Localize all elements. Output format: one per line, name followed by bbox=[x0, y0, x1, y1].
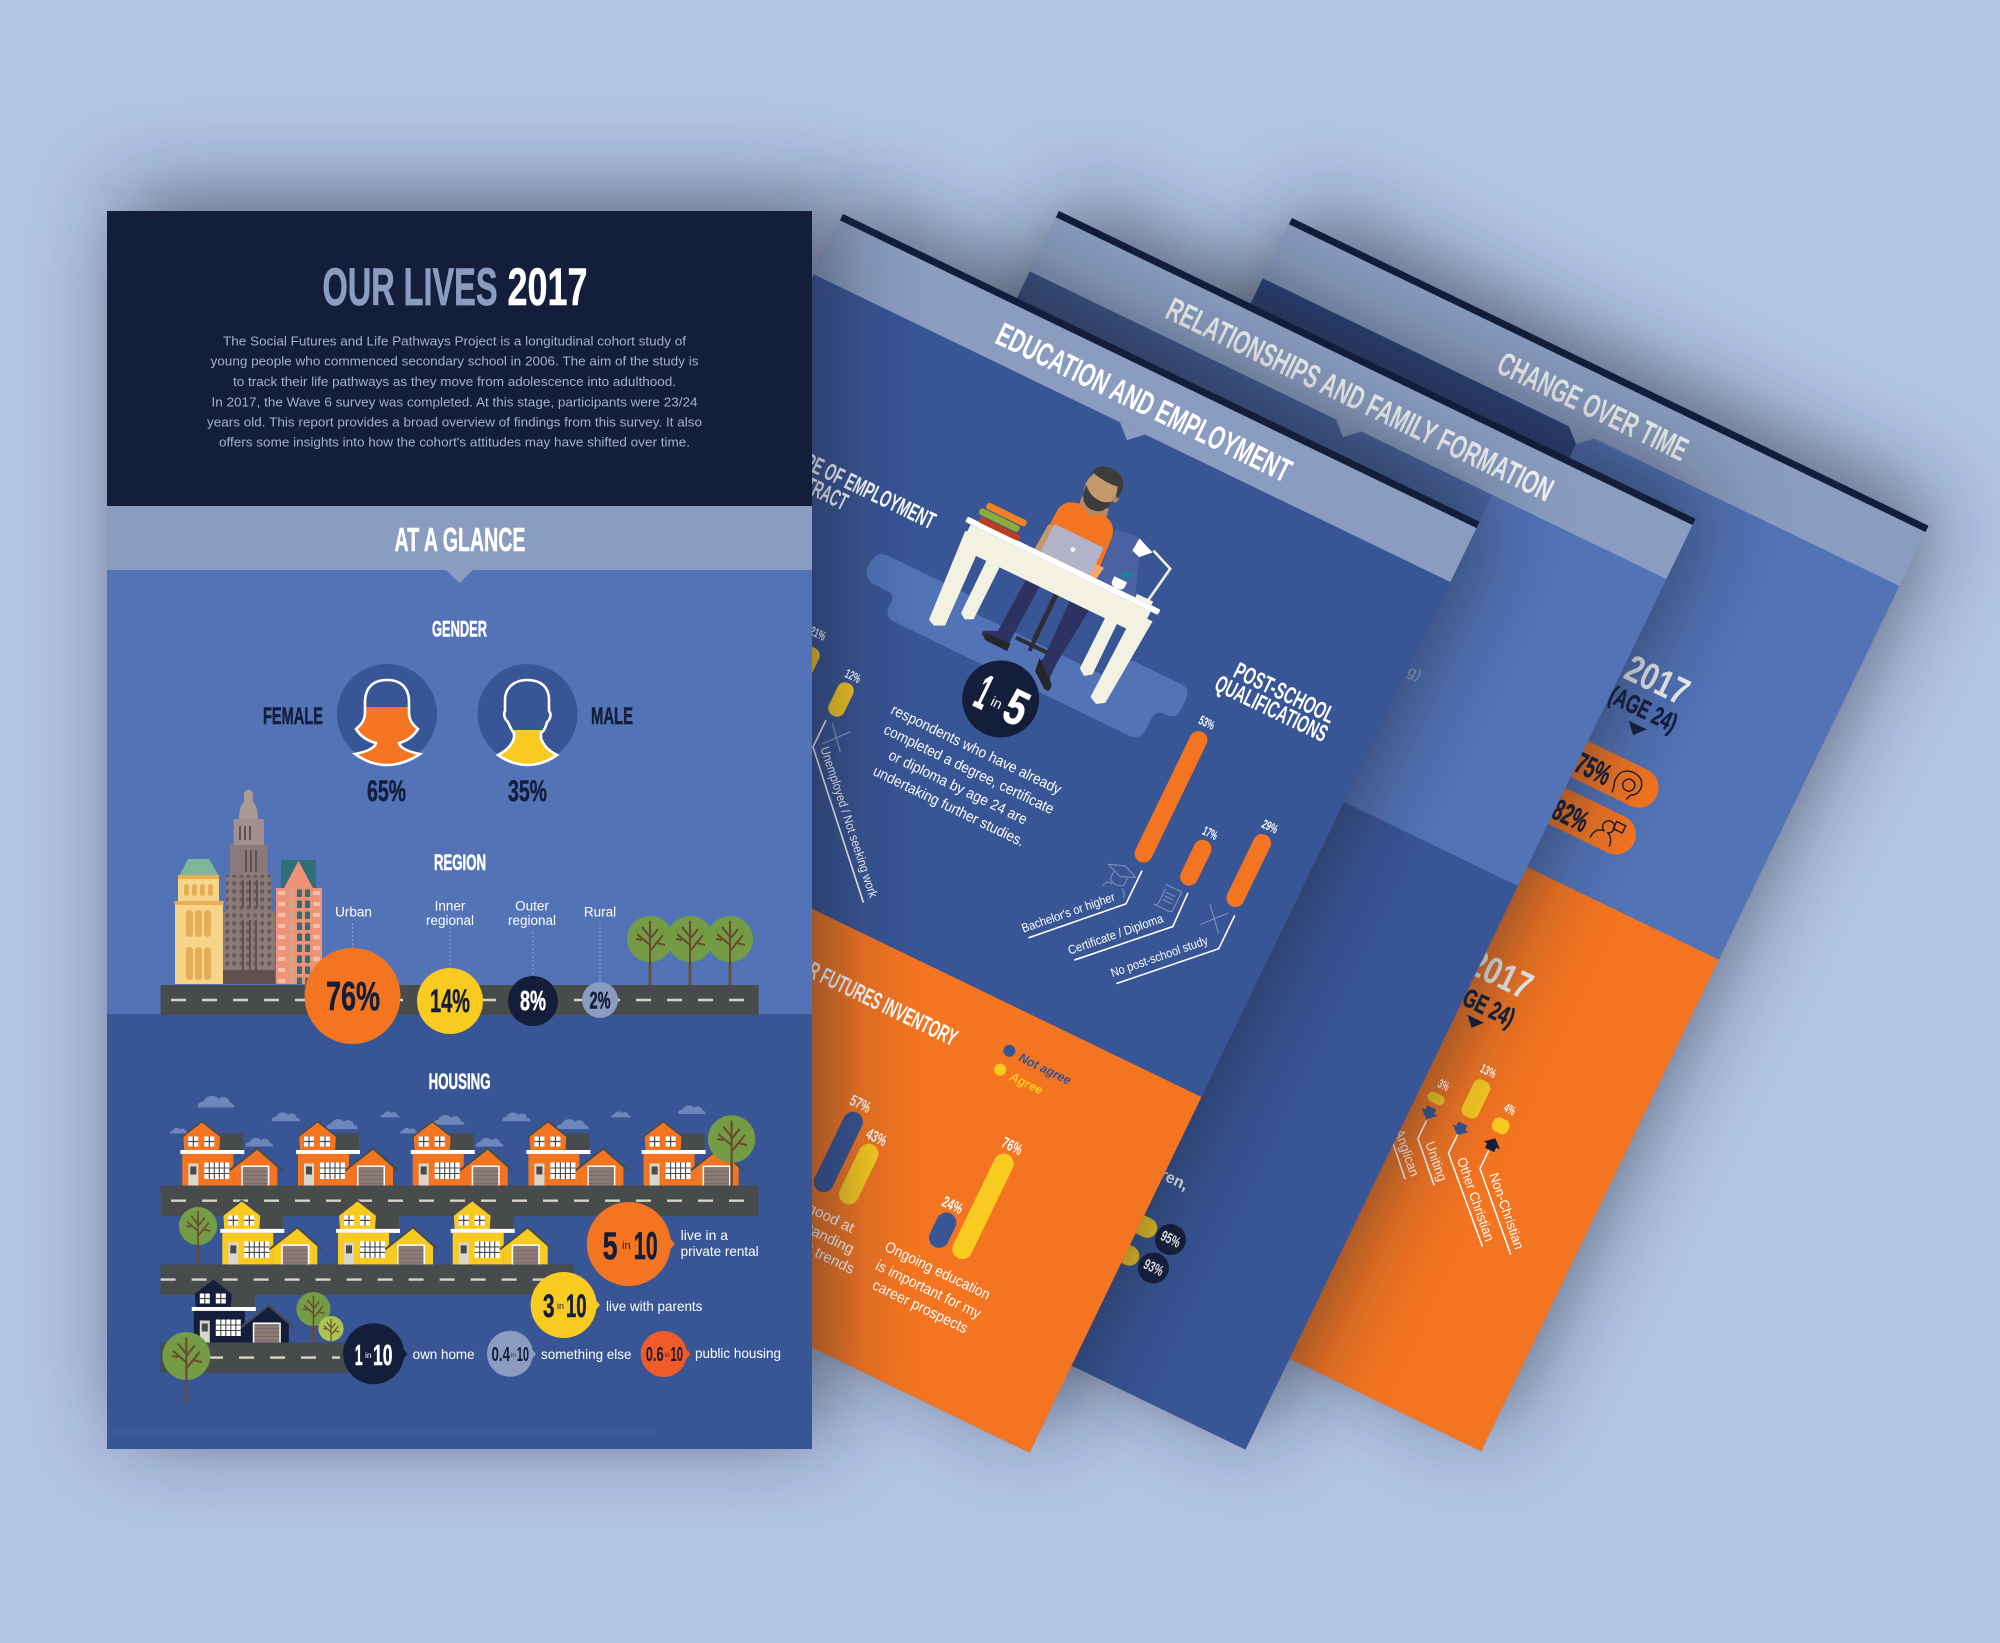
bars: religion change: Anglican bbox=[1392, 1127, 1422, 1178]
intro paragraph: The Social Futures and Life Pathways Project is a longitudinal cohort study of bbox=[223, 334, 686, 348]
bubble: inner regional 14% bbox=[417, 898, 483, 1034]
icon: male 35% bbox=[478, 664, 633, 808]
icon: male 35%: 35% bbox=[508, 775, 547, 808]
title: OUR LIVES bbox=[322, 258, 498, 317]
text fragment: children: ren, bbox=[1157, 1166, 1191, 1194]
badge: 0.4 in 10 something else: 10 bbox=[517, 1344, 529, 1366]
badge: 5 in 10 private rental: live in a bbox=[681, 1227, 728, 1243]
illustration: housing trees bbox=[162, 1115, 755, 1403]
bars: religion change: 3% bbox=[1436, 1076, 1452, 1094]
bar chart: futures inventory: 43% bbox=[863, 1126, 889, 1150]
bar chart: post-school qualifications: 29% bbox=[1260, 816, 1281, 837]
badge: 1 in 10 own home: 10 bbox=[373, 1340, 392, 1372]
road: third row bbox=[161, 1264, 574, 1295]
road: fourth row bbox=[161, 1342, 348, 1373]
bars: 95% and 93%: 95% bbox=[1158, 1228, 1183, 1252]
illustration: yellow houses bbox=[220, 1200, 553, 1264]
badge: 1 in 10 own home: 1 bbox=[355, 1340, 362, 1372]
shadow: education sheet bbox=[409, 199, 1495, 1435]
pill: 75% with head icon: 75% bbox=[1570, 747, 1616, 792]
text: respondents who have already: respondents who have already bbox=[888, 701, 1064, 798]
header block bbox=[107, 211, 812, 506]
illustration: navy house bbox=[192, 1278, 294, 1342]
bubble: rural 2%: Rural bbox=[584, 904, 616, 920]
bar chart: futures inventory: 76% bbox=[999, 1135, 1025, 1159]
band: at a glance bbox=[107, 506, 812, 583]
bar chart: post-school qualifications: 53% bbox=[1196, 712, 1218, 733]
bars: religion change bbox=[1356, 1034, 1591, 1264]
badge: 5 in 10 private rental: private rental bbox=[681, 1243, 759, 1259]
icon: female 65%: FEMALE bbox=[263, 703, 323, 730]
text: ongoing education: career prospects bbox=[869, 1277, 971, 1337]
labels: region dotted leaders bbox=[352, 923, 600, 982]
heading: change over time: CHANGE OVER TIME bbox=[1492, 345, 1694, 468]
intro paragraph: In 2017, the Wave 6 survey was completed. At this stage, participants were 23/24 bbox=[212, 394, 698, 409]
bars: religion change: Uniting bbox=[1422, 1140, 1450, 1183]
bars: 95% and 93% bbox=[1034, 1170, 1191, 1290]
heading: 2017 age 24 lower: (AGE 24) bbox=[1442, 974, 1520, 1033]
badge: 3 in 10 live with parents: 10 bbox=[566, 1288, 586, 1324]
heading: post-school qualifications bbox=[1210, 652, 1341, 748]
heading: type of employment contract bbox=[775, 441, 940, 554]
intro paragraph bbox=[207, 334, 702, 450]
pill: 75% with head icon bbox=[1504, 709, 1665, 814]
panel: education and employment bbox=[393, 214, 1480, 1453]
badge: 3 in 10 live with parents bbox=[531, 1272, 702, 1338]
text: respondents who have already: undertaking further studies. bbox=[870, 763, 1027, 850]
bar chart: post-school qualifications: Certificate / Diploma bbox=[1066, 911, 1165, 958]
illustration: person at desk bbox=[851, 391, 1262, 751]
heading: 2017 age 24 lower bbox=[1437, 938, 1539, 1043]
badge: 5 in 10 private rental: 10 bbox=[634, 1225, 658, 1268]
panel: change over time bbox=[845, 218, 1929, 1451]
heading: type of employment contract: TYPE OF EMPLOYMENT bbox=[784, 441, 940, 535]
text: respondents who have already: completed a degree, certificate bbox=[881, 721, 1057, 818]
badge: 1 in 5: in bbox=[988, 693, 1005, 712]
badge: 0.6 in 10 public housing: 10 bbox=[670, 1344, 683, 1366]
badge: 3 in 10 live with parents: 3 bbox=[543, 1288, 554, 1324]
legend: not agree and agree bbox=[991, 1043, 1073, 1107]
heading: 2017 age 24 upper: (AGE 24) bbox=[1604, 680, 1682, 738]
bubble: inner regional 14%: Inner bbox=[435, 898, 466, 914]
bars: 95% and 93%: 93% bbox=[1141, 1256, 1166, 1280]
heading: 2017 age 24 lower: 2017 bbox=[1461, 942, 1539, 1008]
badge: 0.6 in 10 public housing: 0.6 bbox=[646, 1344, 664, 1366]
pill: 82% with heart icon bbox=[1481, 756, 1643, 861]
bubble: inner regional 14%: regional bbox=[426, 913, 474, 928]
bar chart: futures inventory: 57% bbox=[847, 1092, 873, 1117]
heading: region: REGION bbox=[434, 850, 486, 875]
bubble: inner regional 14%: 14% bbox=[430, 983, 470, 1019]
title: 2017 bbox=[508, 258, 588, 317]
text: good at understanding current trends: current trends bbox=[766, 1222, 857, 1278]
bubble: urban 76% bbox=[304, 904, 400, 1044]
bubble: outer regional 8%: regional bbox=[508, 913, 556, 928]
icon: female 65%: 65% bbox=[367, 775, 406, 808]
heading: relationships and family formation: RELATIONSHIPS AND FAMILY FORMATION bbox=[1161, 290, 1559, 508]
text: ongoing education: Ongoing education bbox=[882, 1238, 993, 1304]
heading: education and employment: EDUCATION AND EMPLOYMENT bbox=[991, 315, 1298, 489]
bar chart: post-school qualifications: 17% bbox=[1200, 823, 1220, 843]
intro paragraph: years old. This report provides a broad overview of findings from this survey. It also bbox=[207, 414, 702, 430]
heading: 2017 age 24 upper: 2017 bbox=[1618, 648, 1696, 714]
bars: religion change: 4% bbox=[1502, 1100, 1518, 1118]
intro paragraph: offers some insights into how the cohort's attitudes may have shifted over time. bbox=[219, 435, 690, 450]
illustration: clouds bbox=[170, 1096, 706, 1146]
bar chart: futures inventory bbox=[809, 1067, 1025, 1263]
pill: 82% with heart icon: 82% bbox=[1547, 794, 1594, 839]
illustration: orange houses bbox=[180, 1122, 744, 1186]
text: good at understanding current trends: I am good at bbox=[774, 1185, 858, 1237]
bars: employment contract fragment: Unemployed / Not seeking work bbox=[818, 745, 880, 900]
heading: post-school qualifications: POST-SCHOOL bbox=[1229, 658, 1339, 729]
badge: 5 in 10 private rental: in bbox=[622, 1240, 631, 1252]
bubble: rural 2% bbox=[582, 904, 618, 1018]
bars: religion change: Non-Christian bbox=[1486, 1171, 1527, 1251]
shadow: change over time sheet bbox=[858, 203, 1942, 1434]
badge: 3 in 10 live with parents: in bbox=[557, 1301, 564, 1311]
bubble: rural 2%: 2% bbox=[590, 988, 610, 1015]
panel: at a glance front sheet bbox=[107, 211, 812, 1449]
bubble: urban 76%: Urban bbox=[335, 904, 372, 920]
badge: 0.6 in 10 public housing bbox=[641, 1331, 781, 1377]
legend: not agree and agree: Not agree bbox=[1017, 1051, 1073, 1088]
badge: 1 in 10 own home: in bbox=[365, 1350, 372, 1360]
bubble: outer regional 8%: 8% bbox=[520, 985, 546, 1016]
heading: 2017 age 24 upper bbox=[1599, 646, 1698, 750]
text fragment: g) bbox=[1405, 663, 1424, 684]
badge: 5 in 10 private rental: 5 bbox=[603, 1225, 618, 1268]
panel: relationships and family formation bbox=[609, 211, 1696, 1450]
illustration: city buildings bbox=[174, 790, 322, 984]
badge: 0.6 in 10 public housing: in bbox=[665, 1353, 670, 1359]
heading: housing: HOUSING bbox=[429, 1069, 491, 1094]
badge: 0.4 in 10 something else: something else bbox=[541, 1346, 632, 1362]
bars: employment contract fragment: 12% bbox=[843, 666, 864, 686]
legend: not agree and agree: Agree bbox=[1007, 1069, 1045, 1097]
badge: 1 in 10 own home: own home bbox=[413, 1346, 475, 1362]
badge: 0.4 in 10 something else bbox=[487, 1331, 632, 1377]
heading: type of employment contract: CONTRACT bbox=[775, 460, 852, 516]
bubble: outer regional 8%: Outer bbox=[515, 898, 549, 914]
road: second row bbox=[161, 1186, 759, 1216]
bar chart: post-school qualifications bbox=[1014, 680, 1310, 1018]
intro paragraph: to track their life pathways as they move from adolescence into adulthood. bbox=[233, 374, 676, 389]
text: good at understanding current trends bbox=[756, 1184, 873, 1278]
text: ongoing education bbox=[865, 1238, 993, 1340]
bubble: outer regional 8% bbox=[508, 898, 558, 1026]
illustration: trees bbox=[627, 916, 753, 985]
icon: female 65% bbox=[263, 664, 437, 808]
text: good at understanding current trends: understanding bbox=[764, 1201, 857, 1258]
heading: post-school qualifications: QUALIFICATIONS bbox=[1210, 671, 1332, 748]
shadow: relationships sheet bbox=[623, 196, 1710, 1437]
text: respondents who have already: or diploma by age 24 are bbox=[886, 747, 1030, 828]
bars: religion change: Other Christian bbox=[1454, 1155, 1497, 1243]
intro paragraph: young people who commenced secondary school in 2006. The aim of the study is bbox=[210, 354, 699, 369]
bubble: urban 76%: 76% bbox=[326, 973, 380, 1019]
icon: male 35%: MALE bbox=[591, 703, 633, 730]
band: at a glance: AT A GLANCE bbox=[394, 521, 526, 558]
bars: employment contract fragment: 21% bbox=[807, 623, 829, 644]
badge: 1 in 5: 1 bbox=[966, 664, 1002, 720]
bar chart: post-school qualifications: No post-school study bbox=[1109, 933, 1210, 980]
road: region bbox=[161, 985, 759, 1015]
bars: religion change: 13% bbox=[1478, 1061, 1499, 1081]
badge: 0.6 in 10 public housing: public housing bbox=[695, 1345, 781, 1361]
heading: gender: GENDER bbox=[432, 616, 487, 642]
heading: career futures inventory: CAREER FUTURES INVENTORY bbox=[760, 936, 962, 1052]
badge: 1 in 5 bbox=[949, 648, 1052, 750]
badge: 0.4 in 10 something else: in bbox=[511, 1353, 516, 1359]
bars: employment contract fragment bbox=[714, 623, 975, 908]
text: respondents who have already bbox=[861, 701, 1066, 856]
badge: 1 in 10 own home bbox=[343, 1323, 475, 1384]
badge: 1 in 5: 5 bbox=[995, 678, 1038, 737]
bar chart: futures inventory: 24% bbox=[939, 1194, 965, 1218]
shadow: front sheet bbox=[122, 196, 827, 1434]
badge: 3 in 10 live with parents: live with parents bbox=[606, 1298, 702, 1314]
bar chart: post-school qualifications: Bachelor's or higher bbox=[1020, 890, 1117, 935]
badge: 0.4 in 10 something else: 0.4 bbox=[492, 1344, 511, 1366]
text: ongoing education: is important for my bbox=[873, 1257, 984, 1323]
badge: 5 in 10 private rental bbox=[587, 1202, 759, 1286]
